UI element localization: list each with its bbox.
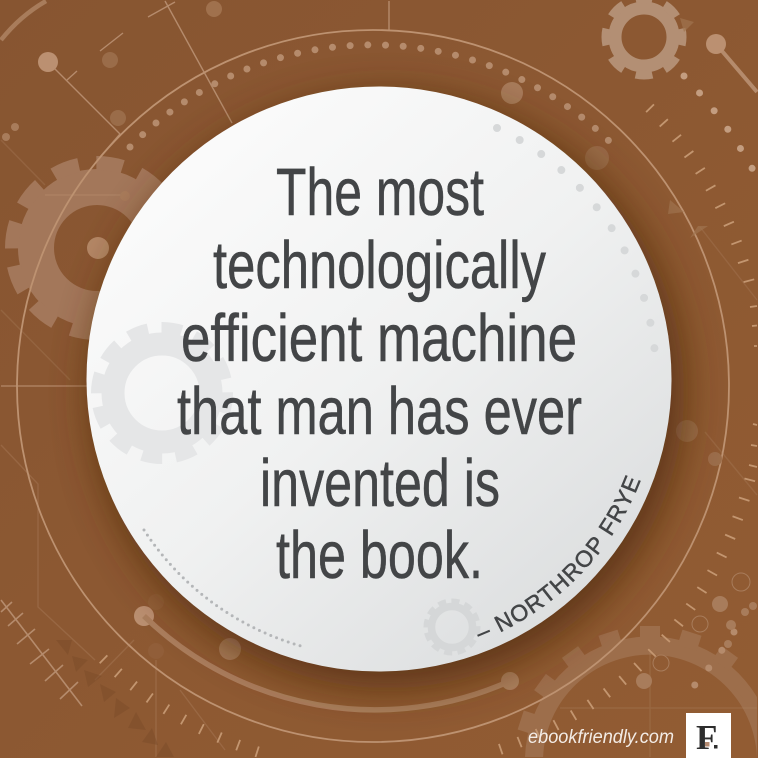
thick arc lower: [144, 616, 519, 710]
gear inside circle left: [97, 328, 227, 458]
dark triangles lower left: [56, 640, 174, 757]
quote text: the book.: [276, 518, 483, 593]
quote text: that man has ever: [177, 374, 582, 449]
tick mark arcs: [101, 108, 757, 752]
crossed tick line lower left: [1, 600, 82, 706]
quote text: The most: [276, 155, 484, 230]
main circle: [86, 86, 672, 672]
gear: large left: [12, 163, 182, 333]
thick arc top left: [1, 1, 46, 40]
outlined small circles: [653, 573, 750, 671]
thick line top right: [706, 34, 757, 92]
logo: [686, 713, 731, 758]
circle shadow: [92, 96, 684, 688]
quote text: efficient machine: [181, 301, 577, 376]
dots inside circle upper right: [497, 128, 655, 354]
dots arc top: [130, 45, 615, 147]
quote text: [177, 155, 582, 593]
quote text: technologically: [213, 228, 546, 303]
gear: bottom right: [521, 626, 757, 757]
logo: F: [696, 718, 717, 757]
gear inside circle small: [426, 601, 478, 653]
quote text: invented is: [260, 446, 500, 521]
dots arc right upper: [684, 76, 753, 170]
site name: ebookfriendly.com: [528, 727, 674, 748]
attribution on curve: – NORTHROP FRYE: [477, 475, 641, 637]
gear: top right: [602, 0, 686, 80]
dots inside circle lower left: [144, 530, 301, 646]
dots arc right lower: [684, 632, 734, 697]
triangles upper right: [668, 18, 708, 238]
